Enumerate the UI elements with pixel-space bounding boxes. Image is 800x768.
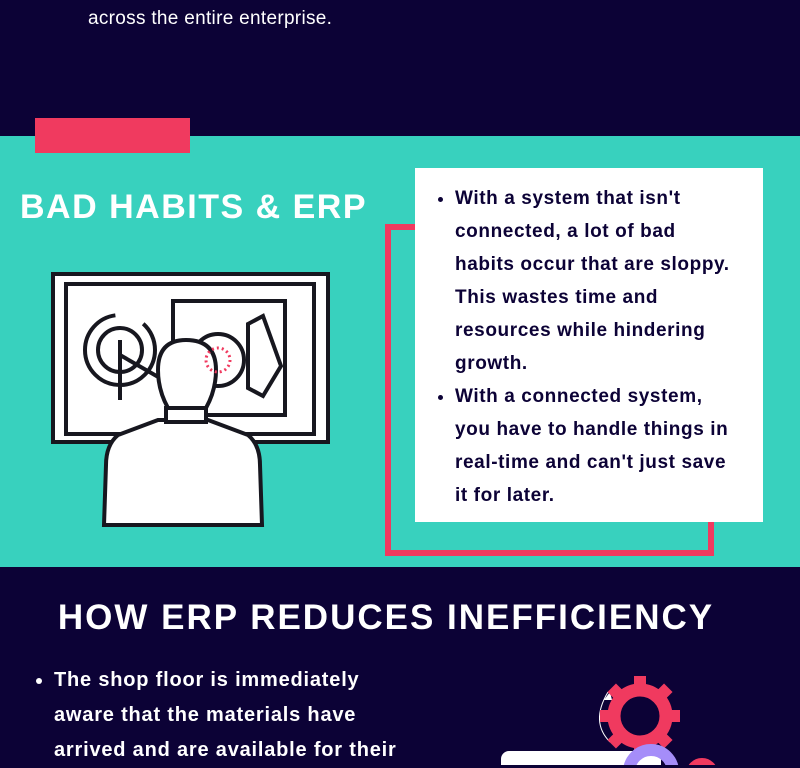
icon: person at screen <box>51 272 330 527</box>
bullet text: shop floor: arrived and are available for their <box>54 739 397 761</box>
text box: bad habits bullets: you have to handle things in <box>455 419 728 440</box>
bullet text: shop floor: aware that the materials have <box>54 704 356 726</box>
text box: bad habits bullets: growth. <box>455 353 528 374</box>
text box: bad habits bullets: resources while hindering <box>455 320 705 341</box>
gears illustration <box>501 676 716 765</box>
text box: bad habits bullets: real-time and can't just save <box>455 452 726 473</box>
text box: bad habits bullets: This wastes time and <box>455 287 658 308</box>
bullet text: shop floor: The shop floor is immediately <box>54 669 359 691</box>
text box: bad habits bullets: With a system that isn't <box>455 188 681 209</box>
bullet text: shop floor <box>36 669 397 761</box>
text box: bad habits bullets: it for later. <box>455 485 555 506</box>
heading: bad habits & erp: BAD HABITS & ERP <box>20 188 367 226</box>
teal section: bad habits <box>0 136 800 567</box>
text box: bad habits bullets: connected, a lot of bad <box>455 221 676 242</box>
text box: bad habits bullets: With a connected system, <box>455 386 703 407</box>
pink outline frame <box>385 224 714 556</box>
heading: how erp reduces inefficiency: HOW ERP REDUCES INEFFICIENCY <box>58 598 714 637</box>
text box: bad habits bullets: habits occur that are sloppy. <box>455 254 730 275</box>
text box: bad habits bullets <box>415 168 763 522</box>
pink accent bar <box>35 118 190 153</box>
top intro text: across the entire enterprise. <box>88 8 332 29</box>
